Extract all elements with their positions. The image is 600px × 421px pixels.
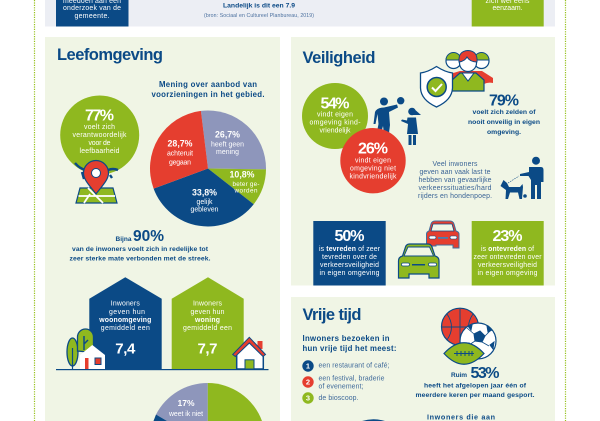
pie chart: opinion on facilities: worden <box>234 188 258 194</box>
text: 79 percent statistic: nooit onveilig in eigen <box>468 119 540 126</box>
callout: 26 percent circle: vindt eigen <box>355 158 391 164</box>
icon: map pin <box>75 161 118 203</box>
icon: two cars <box>398 221 459 278</box>
house: woonomgeving score: woonomgeving <box>98 317 151 324</box>
icon: shield and people <box>420 50 493 107</box>
baseline <box>56 369 268 370</box>
callout: navy participation box: onderzoek van de <box>63 5 121 12</box>
callout: 23 percent dissatisfied: zeer ontevreden over <box>474 254 542 261</box>
callout: 77 percent circle: voelt zich <box>84 124 115 131</box>
text: 79 percent statistic: 79% <box>489 92 519 110</box>
callout: 23 percent dissatisfied: is ontevreden of <box>481 246 534 253</box>
callout: 50 percent satisfied: is tevreden of zeer <box>319 246 381 253</box>
house: woning score: woning <box>194 317 220 324</box>
pie chart: opinion on facilities: gegaan <box>169 160 191 166</box>
pie chart: opinion on facilities: 10,8% <box>230 170 255 180</box>
text: pie chart title <box>152 80 264 99</box>
text: traffic nuisance: rijders en hondenpoep. <box>418 193 492 200</box>
callout: 50 percent satisfied: 50% <box>334 228 364 245</box>
callout: green loneliness box: eenzaam. <box>492 5 523 12</box>
callout: 23 percent dissatisfied: 23% <box>492 228 522 245</box>
callout: 77 percent circle: leefbaarheid <box>80 148 120 155</box>
list item 3 <box>302 392 359 404</box>
callout: 54 percent circle <box>302 83 368 149</box>
pie chart: opinion on facilities: achteruit <box>167 150 193 158</box>
icon: large house <box>233 337 266 369</box>
callout: 54 percent circle: vriendelijk <box>320 128 351 134</box>
text: traffic nuisance: Veel inwoners <box>432 161 478 168</box>
list item 1: 1 <box>306 362 310 370</box>
callout: 50 percent satisfied: tevreden over de <box>322 254 377 261</box>
callout: 50 percent satisfied: in eigen omgeving <box>320 270 380 277</box>
text: 53 percent sports: heeft het afgelopen jaar één of <box>424 382 527 390</box>
panel: top band <box>45 0 555 26</box>
callout: 77 percent circle: 77% <box>85 108 114 124</box>
text: traffic nuisance: verkeerssituaties/hard <box>418 185 492 192</box>
icon: sports balls <box>442 308 496 364</box>
text: 79 percent statistic: voelt zich zelden of <box>472 109 536 116</box>
text: connection with region: zeer sterke mate verbonden met de streek. <box>70 256 211 262</box>
pie chart: second chart: 17% <box>178 398 195 408</box>
list item 2 <box>302 376 385 390</box>
house: woning score: gemiddeld een <box>183 325 232 332</box>
text: 79 percent statistic <box>468 92 540 136</box>
icon: navy circle top <box>362 419 385 421</box>
callout: 23 percent dissatisfied: in eigen omgeving <box>478 270 538 277</box>
text: 53 percent sports: Ruim <box>451 372 467 379</box>
callout: 77 percent circle: voor de <box>88 140 111 147</box>
callout: 50 percent satisfied: verkeersveiligheid <box>320 262 379 269</box>
pie chart: opinion on facilities: 28,7% <box>168 138 193 148</box>
text: 79 percent statistic: omgeving. <box>487 129 521 136</box>
callout: 77 percent circle: verantwoordelijk <box>72 132 127 139</box>
pie chart: opinion on facilities: beter ge- <box>232 181 260 188</box>
callout: 77 percent circle <box>60 96 139 174</box>
callout: 23 percent dissatisfied <box>472 221 544 286</box>
text: 53 percent sports <box>416 365 535 399</box>
house: woonomgeving score: Inwoners <box>111 300 140 308</box>
callout: 26 percent circle: omgeving niet <box>350 166 396 172</box>
callout: navy participation box <box>56 0 128 26</box>
text: pie chart title: Mening over aanbod van <box>159 80 257 89</box>
pie chart: opinion on facilities: gelijk <box>196 199 213 206</box>
pie chart: opinion on facilities: 26,7% <box>215 130 240 140</box>
list item 2: een festival, braderie <box>318 376 385 382</box>
heading: Leefomgeving: Leefomgeving <box>57 46 163 64</box>
text: source: (bron: Sociaal en Cultureel Planbureau, 2019) <box>204 13 314 19</box>
house: woning score: 7,7 <box>198 340 218 358</box>
text: 53 percent sports: 53% <box>470 365 500 382</box>
list item 3: de bioscoop. <box>318 395 359 402</box>
heading: Veiligheid: Veiligheid <box>302 49 376 67</box>
pie chart: second chart <box>154 383 262 421</box>
text: 53 percent sports: meerdere keren per maand gesport. <box>416 392 535 399</box>
text: pie chart title: voorzieningen in het gebied. <box>152 90 264 99</box>
callout: 23 percent dissatisfied: verkeersveiligheid <box>478 262 537 269</box>
callout: 26 percent circle: 26% <box>358 140 388 158</box>
pie chart: opinion on facilities: heeft geen <box>211 142 244 148</box>
panel: Leefomgeving <box>45 37 280 421</box>
text: connection with region: 90% <box>133 228 164 245</box>
house: woonomgeving score <box>89 277 162 369</box>
text: traffic nuisance: geven aan vaak last te <box>420 169 491 176</box>
house: woonomgeving score: geven hun <box>109 309 145 316</box>
house: woning score: Inwoners <box>193 300 223 308</box>
icon: adult and child with ball <box>374 97 421 145</box>
callout: green loneliness box <box>472 0 544 26</box>
text: list intro: Inwoners bezoeken in <box>302 334 390 343</box>
callout: 54 percent circle: vindt eigen <box>317 112 353 118</box>
callout: 54 percent circle: omgeving kind- <box>310 120 360 126</box>
icon: person walking dog <box>500 157 544 199</box>
list item 2: 2 <box>306 378 310 386</box>
list item 1: een restaurant of café; <box>318 362 390 370</box>
panel: Vrije tijd <box>291 297 555 421</box>
text: connection with region <box>70 228 211 262</box>
callout: navy participation box: gemeente. <box>74 13 110 20</box>
pie chart: opinion on facilities: gebleven <box>190 206 219 214</box>
callout: 54 percent circle: 54% <box>320 96 350 112</box>
callout: 26 percent circle <box>340 128 406 193</box>
pie chart: opinion on facilities: mening <box>216 149 239 156</box>
house: woonomgeving score: gemiddeld een <box>101 325 150 332</box>
list item 2: of evenement; <box>318 384 364 390</box>
pie chart: opinion on facilities: 33,8% <box>192 188 217 198</box>
house: woning score <box>172 277 244 369</box>
list item 1 <box>302 360 390 372</box>
icon: trees and small house <box>67 329 105 369</box>
text: connection with region: Bijna <box>116 236 132 243</box>
callout: 26 percent circle: kindvriendelijk <box>350 174 397 180</box>
house: woning score: geven hun <box>190 309 225 316</box>
text: list intro <box>302 334 396 353</box>
panel: Veiligheid <box>291 37 555 286</box>
house: woonomgeving score: 7,4 <box>115 340 136 358</box>
text: national score: Landelijk is dit een 7.9 <box>223 2 295 10</box>
pie chart: opinion on facilities <box>150 110 266 226</box>
heading: Vrije tijd: Vrije tijd <box>302 306 362 324</box>
text: list intro: hun vrije tijd het meest: <box>302 344 396 353</box>
text: traffic nuisance: hebben van gevaarlijke <box>418 177 492 184</box>
list item 3: 3 <box>306 394 310 402</box>
pie chart: second chart: weet ik niet <box>168 411 203 418</box>
text: connection with region: van de inwoners voelt zich in redelijke tot <box>72 246 209 253</box>
text: traffic nuisance <box>418 161 492 200</box>
callout: 50 percent satisfied <box>313 221 386 286</box>
